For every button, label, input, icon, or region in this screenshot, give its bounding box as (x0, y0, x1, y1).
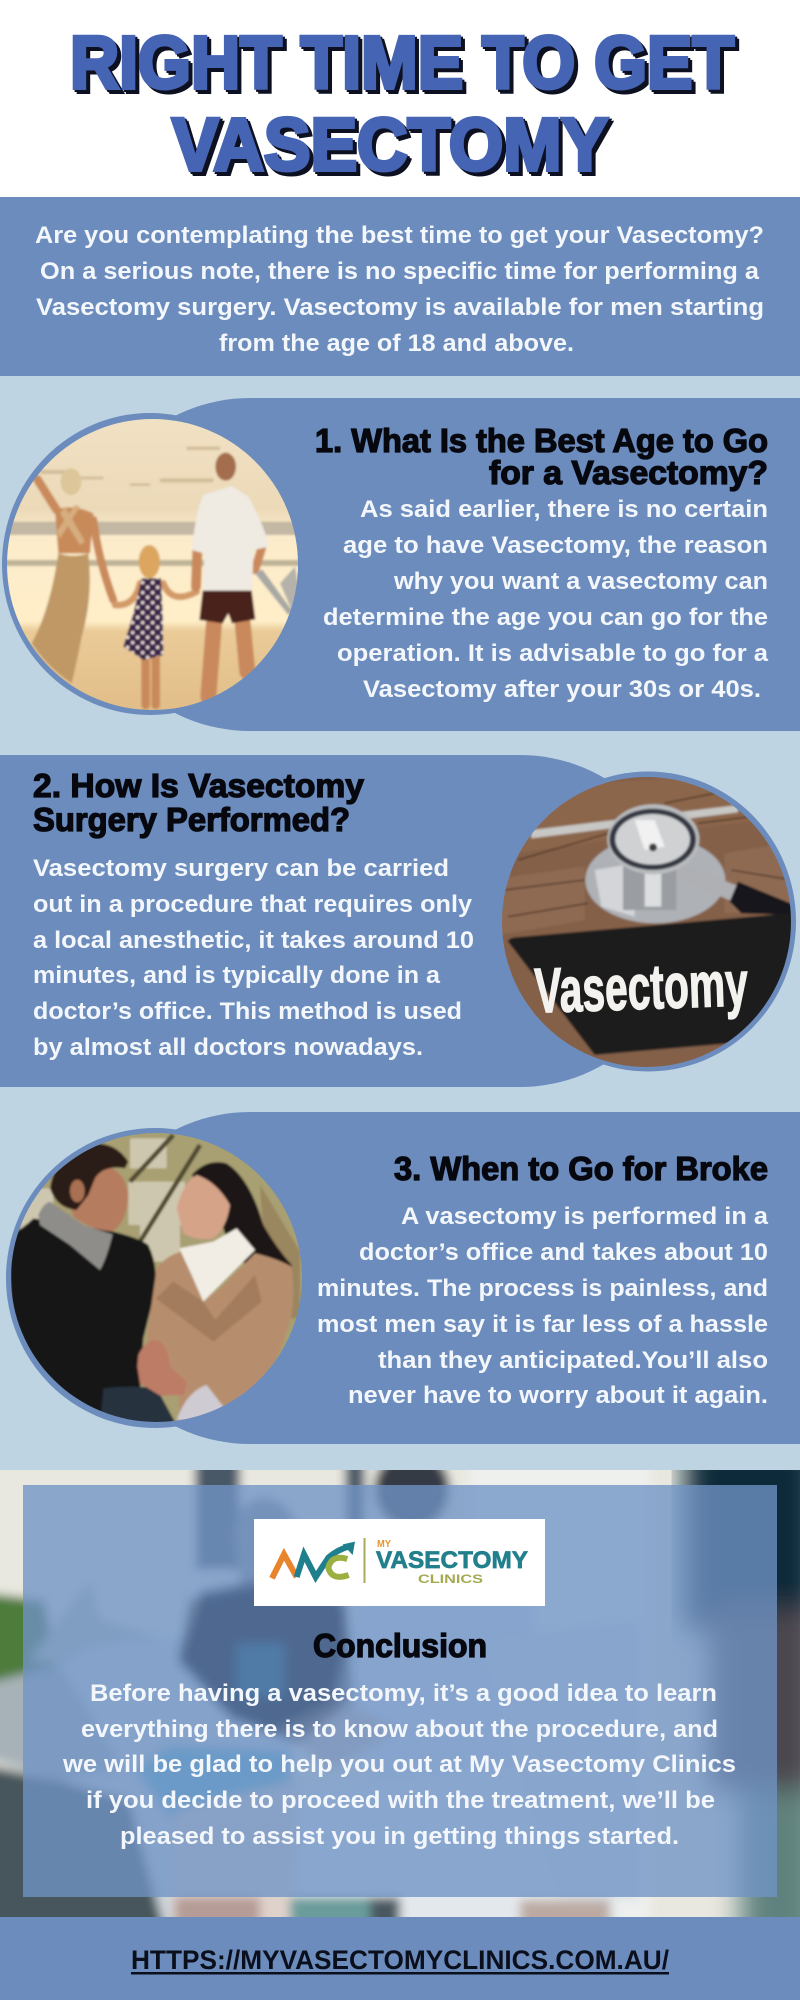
photo ring 3 (6, 1128, 304, 1428)
conclusion text: pleased to assist you in getting things started. (120, 1823, 679, 1850)
heading 1 (315, 422, 768, 491)
intro text: Vasectomy surgery. Vasectomy is available for men starting (36, 294, 764, 321)
body text 3: most men say it is far less of a hassle (317, 1311, 768, 1338)
body text 3: minutes. The process is painless, and (317, 1275, 768, 1302)
body text 1: Vasectomy after your 30s or 40s. (363, 676, 761, 703)
panel: conclusion (0, 1470, 800, 1917)
shaded figure behind text (180, 1580, 352, 1740)
body text 3: doctor’s office and takes about 10 (359, 1239, 768, 1266)
heading: conclusion: Conclusion (313, 1627, 487, 1664)
body text 3: A vasectomy is performed in a (401, 1203, 769, 1230)
conclusion text: everything there is to know about the procedure, and (81, 1716, 718, 1743)
body text 3: than they anticipated.You’ll also (378, 1347, 768, 1374)
intro text (35, 222, 764, 357)
body text 1: age to have Vasectomy, the reason (343, 532, 768, 559)
man (196, 548, 262, 697)
body text 2: Vasectomy surgery can be carried (33, 855, 449, 882)
panel: section 1 (0, 398, 800, 731)
title: VASECTOMY (172, 103, 608, 186)
panel: section 2 (0, 755, 800, 1087)
title: RIGHT TIME TO GET (70, 21, 734, 104)
conclusion text: Before having a vasectomy, it’s a good idea to learn (90, 1680, 717, 1707)
body text 3: never have to worry about it again. (348, 1382, 768, 1409)
body text 1: operation. It is advisable to go for a (337, 640, 769, 667)
photo: consultation background (0, 1470, 800, 1917)
panel: section 3 (0, 1112, 800, 1445)
footer url: HTTPS://MYVASECTOMYCLINICS.COM.AU/ (131, 1945, 669, 1975)
body text 3 (317, 1203, 769, 1409)
body text 1: why you want a vasectomy can (393, 568, 768, 595)
woman (192, 1162, 292, 1282)
heading 2 (33, 767, 365, 838)
photo: family on beach (7, 419, 298, 710)
conclusion text: if you decide to proceed with the treatment, we’ll be (86, 1787, 715, 1814)
logo wordmark: CLINICS (418, 1572, 483, 1586)
photo: stethoscope and vasectomy tag (502, 777, 791, 1067)
body text 2: minutes, and is typically done in a (33, 962, 441, 989)
logo wordmark: VASECTOMY (376, 1547, 528, 1574)
translucent text box (23, 1485, 777, 1897)
body text 2: out in a procedure that requires only (33, 891, 473, 918)
intro text: from the age of 18 and above. (219, 330, 574, 357)
heading 2: Surgery Performed? (33, 801, 350, 838)
hands (137, 1340, 187, 1396)
girl (115, 583, 197, 605)
body text 1: determine the age you can go for the (323, 604, 768, 631)
body text 2: a local anesthetic, it takes around 10 (33, 927, 474, 954)
header band (0, 0, 800, 197)
woman (238, 1498, 294, 1586)
body text 1: As said earlier, there is no certain (360, 496, 768, 523)
body text 1 (323, 496, 769, 703)
logo wordmark: MY (377, 1539, 391, 1550)
intro text: On a serious note, there is no specific time for performing a (40, 258, 760, 285)
body text 2 (33, 855, 474, 1061)
conclusion text (62, 1680, 736, 1850)
logo divider (364, 1538, 366, 1583)
woman (37, 479, 113, 600)
photo: couple on a bench (11, 1133, 302, 1422)
heading 2: 2. How Is Vasectomy (33, 767, 365, 804)
body text 2: doctor’s office. This method is used (33, 998, 462, 1025)
heading 1: 1. What Is the Best Age to Go (315, 422, 768, 459)
intro text: Are you contemplating the best time to get your Vasectomy? (35, 222, 764, 249)
logo wordmark (376, 1539, 528, 1586)
man (367, 1470, 456, 1519)
photo ring 2 (500, 772, 796, 1072)
foreground blurred figure (685, 1440, 800, 1950)
man (11, 1217, 157, 1412)
icon: MVC mark (272, 1542, 355, 1578)
footer band (0, 1917, 800, 2000)
title (70, 21, 734, 186)
panel: intro (0, 197, 800, 376)
body text 2: by almost all doctors nowadays. (33, 1034, 423, 1061)
conclusion text: we will be glad to help you out at My Vasectomy Clinics (62, 1751, 736, 1778)
photo ring 1 (2, 413, 298, 715)
heading 3: 3. When to Go for Broke (394, 1150, 768, 1187)
logo (254, 1519, 545, 1606)
heading 1: for a Vasectomy? (489, 454, 768, 491)
